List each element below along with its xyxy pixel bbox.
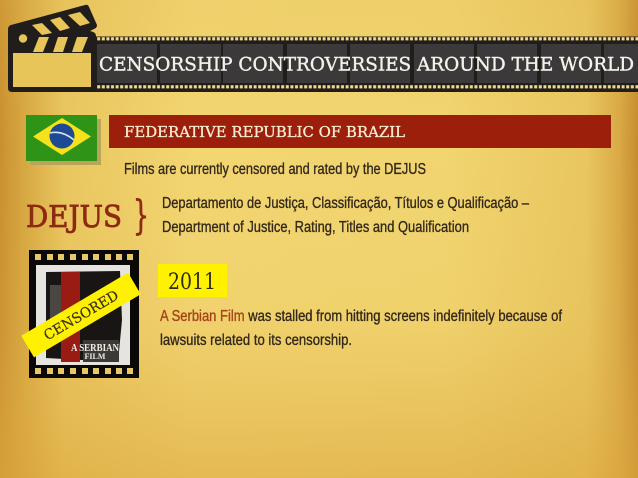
text: film description xyxy=(160,308,563,349)
censored stamp xyxy=(21,273,141,357)
icon: clapperboard xyxy=(8,5,97,92)
poster title xyxy=(71,343,120,361)
text: DEJUS definition xyxy=(162,195,529,236)
title banner: film strip xyxy=(92,36,638,92)
brace: } xyxy=(133,193,149,239)
poster title: A SERBIAN xyxy=(71,343,120,354)
text: film description: A Serbian Film was stalled from hitting screens indefinitely because of xyxy=(160,308,563,325)
poster title: FILM xyxy=(85,352,106,361)
year tag: 2011 xyxy=(168,270,216,295)
sprocket holes xyxy=(35,254,133,374)
text: DEJUS definition: Departamento de Justiça, Classificação, Títulos e Qualificação – xyxy=(162,195,529,212)
text: film description: lawsuits related to its censorship. xyxy=(160,332,352,349)
film poster xyxy=(29,250,139,378)
heading: country bar: FEDERATIVE REPUBLIC OF BRAZIL xyxy=(124,125,405,141)
text: intro: Films are currently censored and rated by the DEJUS xyxy=(124,161,426,178)
heading: country bar xyxy=(109,115,611,148)
title: CENSORSHIP CONTROVERSIES AROUND THE WORLD xyxy=(99,54,634,76)
censored stamp: CENSORED xyxy=(41,288,122,344)
heading: DEJUS: DEJUS xyxy=(26,200,122,235)
icon: Brazil flag xyxy=(26,115,101,165)
year tag xyxy=(158,264,227,297)
text: DEJUS definition: Department of Justice, Rating, Titles and Qualification xyxy=(162,219,469,236)
